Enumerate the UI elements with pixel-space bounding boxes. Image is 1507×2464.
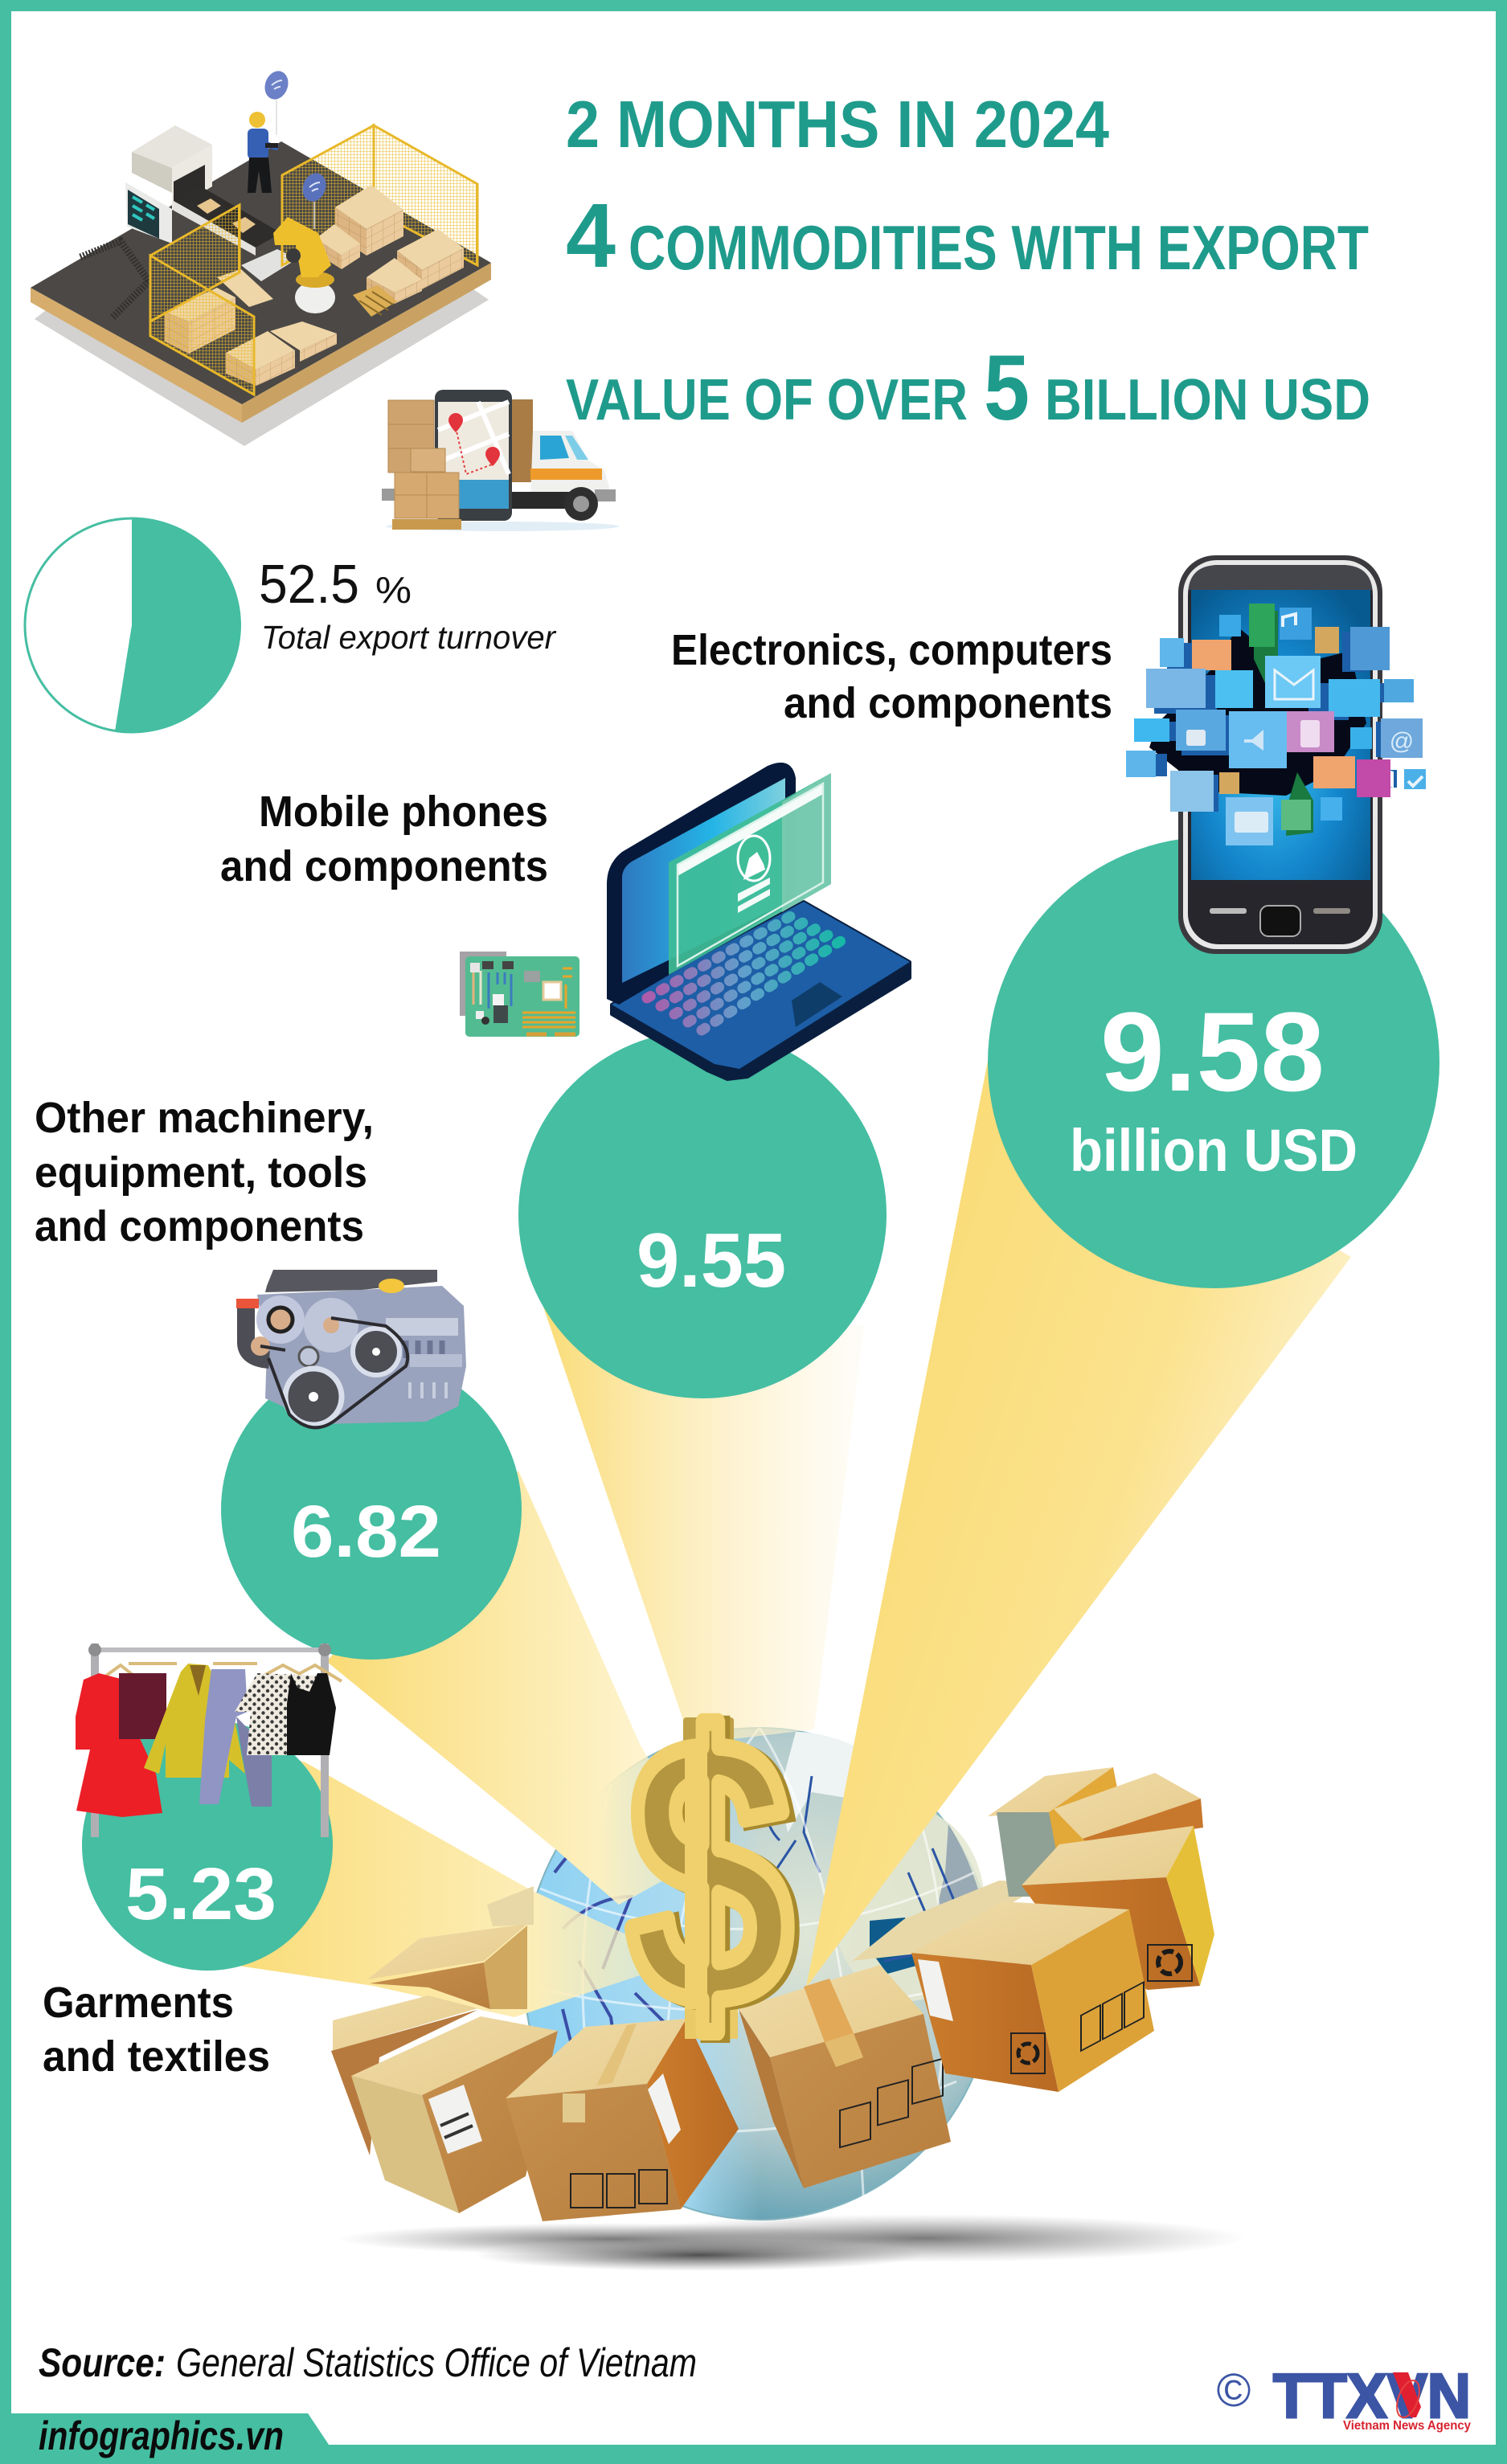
label: electronics — [671, 626, 1112, 727]
icon: laptop — [607, 763, 910, 1079]
circle: 9.58 billion USD: 9.58 — [1100, 988, 1325, 1115]
light ray to 5.23 circle — [227, 1744, 683, 2017]
label: other machinery: equipment, tools — [35, 1148, 367, 1197]
logo: TTXVN: Vietnam News Agency — [1343, 2419, 1471, 2433]
title: BILLION USD — [1045, 368, 1370, 432]
bottom left tab — [0, 2413, 329, 2464]
circle: 9.55 — [518, 1030, 887, 1398]
light ray to 9.55 circle — [543, 1304, 864, 1744]
logo: TTXVN: TTXVN — [1273, 2360, 1471, 2431]
pie chart: 52.5 percent — [25, 518, 241, 733]
label: other machinery: Other machinery, — [35, 1094, 374, 1142]
website label: infographics.vn — [39, 2413, 284, 2458]
title: 4 — [566, 185, 616, 286]
circle: 9.58 billion USD — [988, 837, 1439, 1288]
icon: cardboard boxes — [331, 1767, 1214, 2221]
circle: 9.55: 9.55 — [637, 1218, 786, 1304]
circle: 5.23: 5.23 — [125, 1853, 276, 1935]
label: electronics: and components — [784, 679, 1112, 727]
source line: Source: — [39, 2340, 166, 2385]
title: 2 MONTHS IN 2024 — [566, 87, 1109, 162]
circle: 9.58 billion USD: billion USD — [1070, 1117, 1358, 1184]
text: 52.5 percent total export turnover: Total export turnover — [261, 619, 557, 656]
icon: car engine — [236, 1270, 466, 1427]
title: COMMODITIES WITH EXPORT — [629, 212, 1369, 283]
text: 52.5 percent total export turnover: % — [375, 569, 412, 611]
label: mobile phones — [220, 788, 548, 890]
circle: 6.82 — [221, 1359, 522, 1660]
label: electronics: Electronics, computers — [671, 626, 1112, 674]
icon: clothes rack — [76, 1643, 342, 1837]
label: other machinery: and components — [35, 1202, 364, 1250]
ground shadow — [338, 2214, 1246, 2271]
source line: General Statistics Office of Vietnam — [176, 2340, 697, 2385]
label: garments — [43, 1979, 270, 2081]
text: 52.5 percent total export turnover — [259, 554, 557, 656]
icon: gold dollar sign: $ — [633, 1663, 796, 2086]
light ray to 9.58 circle — [806, 1053, 1351, 1987]
label: mobile phones: Mobile phones — [259, 788, 548, 836]
text: 52.5 percent total export turnover: 52.5 — [259, 554, 359, 615]
icon: gold dollar sign: $ — [628, 1660, 792, 2084]
icon: delivery truck and phone map — [382, 390, 619, 531]
icon: isometric warehouse — [31, 68, 491, 446]
source line — [39, 2340, 697, 2385]
globe — [524, 1728, 995, 2220]
title: 5 — [984, 337, 1030, 440]
title: VALUE OF OVER — [566, 368, 968, 432]
label: mobile phones: and components — [220, 842, 548, 890]
label: garments: Garments — [43, 1979, 234, 2027]
icon: smartphone with app cubes: @ — [1390, 728, 1414, 755]
label: garments: and textiles — [43, 2032, 270, 2081]
icon: smartphone with app cubes — [1126, 555, 1426, 954]
logo: TTXVN: © — [1217, 2364, 1251, 2417]
circle: 5.23 — [82, 1720, 333, 1971]
label: other machinery — [35, 1094, 374, 1250]
icon: motherboard — [460, 952, 579, 1037]
light ray to 6.82 circle — [326, 1471, 707, 1905]
circle: 6.82: 6.82 — [291, 1491, 441, 1573]
title — [566, 87, 1370, 440]
